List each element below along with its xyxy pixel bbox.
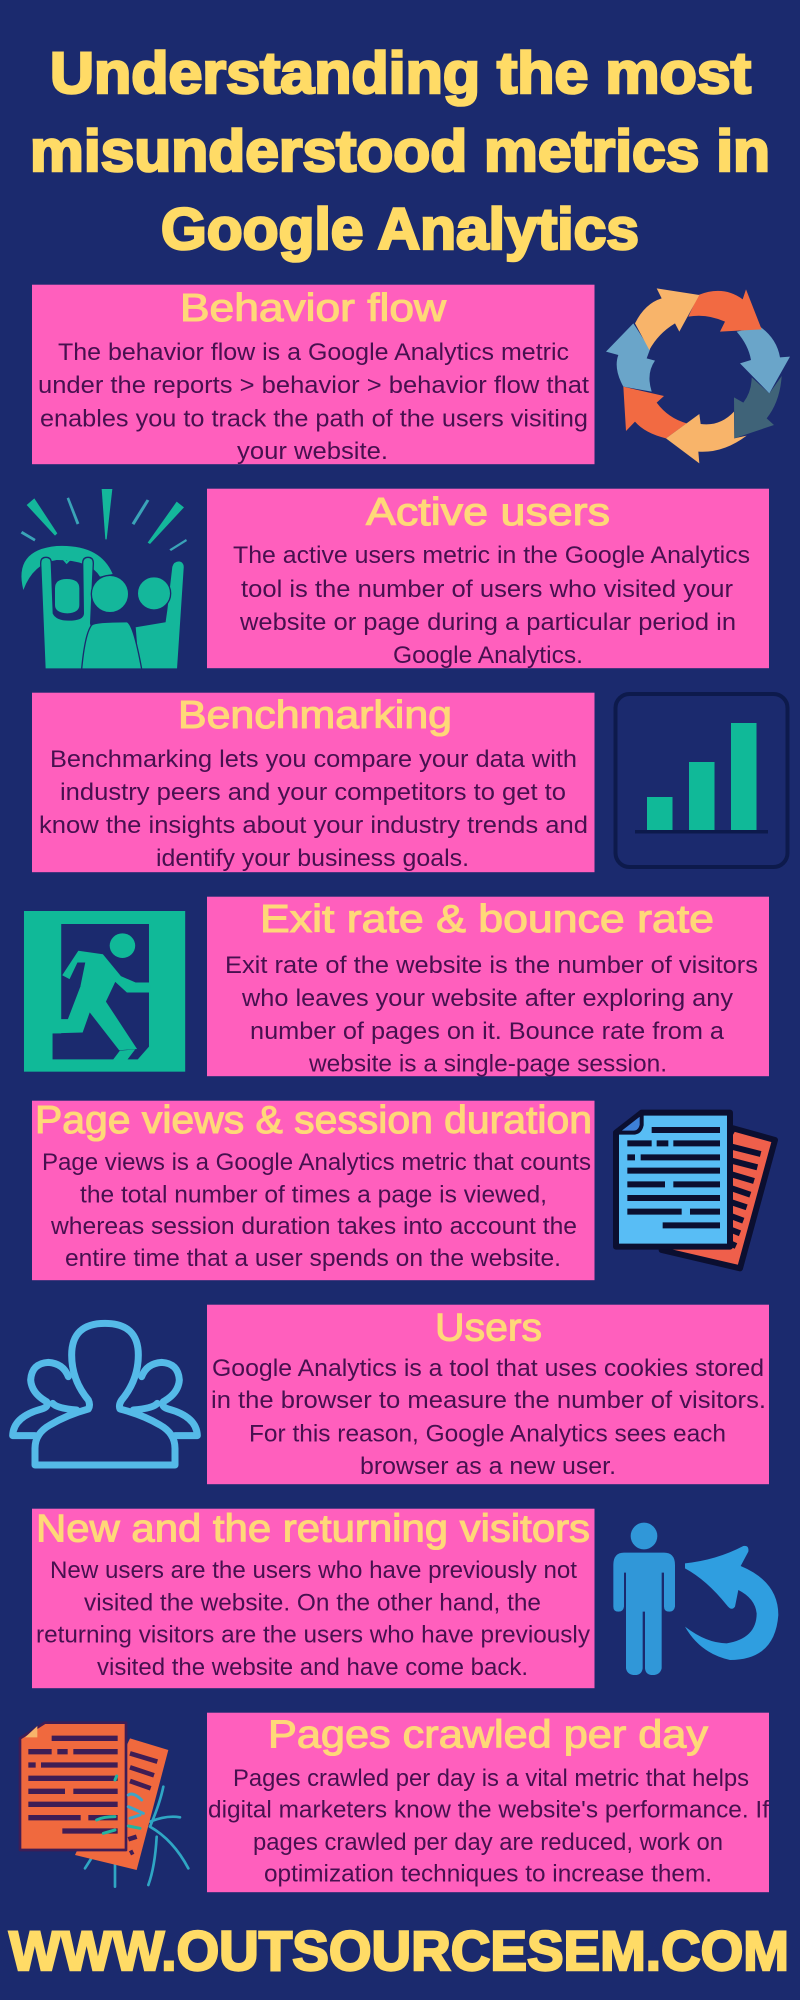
text block: new and returning visitors: returning visitors are the users who have previously: [36, 1622, 590, 1648]
icon: bar chart: [616, 694, 788, 867]
text block: active users: tool is the number of users who visited your: [241, 576, 733, 603]
heading: behavior flow: Behavior flow: [180, 287, 447, 330]
icon: users outline: [13, 1323, 197, 1465]
title: misunderstood metrics in: [30, 119, 770, 184]
text block: exit rate and bounce rate: who leaves your website after exploring any: [241, 985, 733, 1012]
title: [30, 41, 770, 262]
heading: page views and session duration: Page views & session duration: [35, 1099, 592, 1142]
text block: exit rate and bounce rate: number of pages on it. Bounce rate from a: [250, 1018, 725, 1045]
panel: pages crawled per day: [207, 1713, 769, 1892]
text block: exit rate and bounce rate: [225, 952, 758, 1078]
panel: active users: [207, 489, 769, 669]
text block: page views and session duration: entire time that a user spends on the website.: [65, 1245, 561, 1272]
text block: users: [211, 1355, 766, 1480]
panel: page views and session duration: [32, 1099, 594, 1280]
text block: new and returning visitors: [36, 1557, 590, 1681]
text block: pages crawled per day: [208, 1765, 769, 1888]
text block: benchmarking: Benchmarking lets you compare your data with: [50, 746, 577, 773]
panel: exit rate and bounce rate: [207, 897, 769, 1078]
text block: benchmarking: [39, 746, 588, 872]
panel: benchmarking: [32, 693, 594, 872]
text block: exit rate and bounce rate: website is a single-page session.: [308, 1050, 667, 1078]
panel: behavior flow: [32, 285, 594, 465]
text block: users: Google Analytics is a tool that uses cookies stored: [212, 1355, 764, 1382]
panel: new and returning visitors: [32, 1508, 594, 1688]
text block: benchmarking: know the insights about your industry trends and: [39, 812, 588, 839]
heading: active users: Active users: [366, 491, 610, 534]
heading: users: Users: [435, 1306, 542, 1350]
text block: page views and session duration: whereas session duration takes into account the: [50, 1213, 577, 1240]
icon: cheering users: [21, 489, 187, 669]
text block: active users: The active users metric in the Google Analytics: [233, 542, 750, 569]
heading: benchmarking: Benchmarking: [178, 694, 452, 737]
text block: pages crawled per day: Pages crawled per day is a vital metric that helps: [233, 1765, 749, 1792]
text block: behavior flow: your website.: [237, 438, 388, 465]
title: Google Analytics: [161, 197, 639, 262]
text block: active users: website or page during a particular period in: [239, 609, 736, 636]
panel: users: [207, 1305, 769, 1484]
heading: exit rate and bounce rate: Exit rate & bounce rate: [260, 898, 714, 941]
text block: users: For this reason, Google Analytics sees each: [249, 1420, 726, 1448]
text block: behavior flow: under the reports > behavior > behavior flow that: [38, 372, 589, 399]
icon: exit sign: [24, 911, 185, 1072]
heading: pages crawled per day: Pages crawled per day: [268, 1714, 709, 1756]
text block: new and returning visitors: New users are the users who have previously not: [50, 1557, 577, 1584]
icon: circular arrows cycle: [606, 288, 790, 463]
text block: page views and session duration: Page views is a Google Analytics metric that counts: [42, 1149, 591, 1176]
text block: users: in the browser to measure the number of visitors.: [211, 1387, 766, 1414]
text block: page views and session duration: the total number of times a page is viewed,: [80, 1182, 547, 1208]
text block: pages crawled per day: pages crawled per day are reduced, work on: [253, 1829, 723, 1856]
text block: active users: [233, 542, 750, 669]
text block: new and returning visitors: visited the website. On the other hand, the: [84, 1590, 541, 1616]
icon: person with return arrow: [613, 1523, 778, 1675]
text block: exit rate and bounce rate: Exit rate of the website is the number of visitors: [225, 952, 758, 979]
icon: blue documents: [616, 1113, 775, 1268]
text block: behavior flow: enables you to track the path of the users visiting: [40, 406, 588, 432]
footer url: WWW.OUTSOURCESEM.COM: [9, 1919, 789, 1982]
text block: pages crawled per day: digital marketers know the website's performance. If: [208, 1796, 769, 1824]
text block: users: browser as a new user.: [360, 1453, 616, 1480]
text block: benchmarking: identify your business goals.: [156, 845, 469, 872]
text block: new and returning visitors: visited the website and have come back.: [97, 1654, 528, 1681]
title: Understanding the most: [50, 41, 751, 106]
text block: benchmarking: industry peers and your competitors to get to: [60, 779, 566, 806]
text block: pages crawled per day: optimization techniques to increase them.: [264, 1860, 712, 1888]
heading: new and returning visitors: New and the returning visitors: [36, 1508, 590, 1550]
text block: active users: Google Analytics.: [393, 642, 583, 669]
text block: behavior flow: [38, 339, 589, 465]
text block: page views and session duration: [42, 1149, 591, 1272]
text block: behavior flow: The behavior flow is a Google Analytics metric: [58, 339, 569, 366]
icon: documents with spider: [20, 1723, 188, 1887]
